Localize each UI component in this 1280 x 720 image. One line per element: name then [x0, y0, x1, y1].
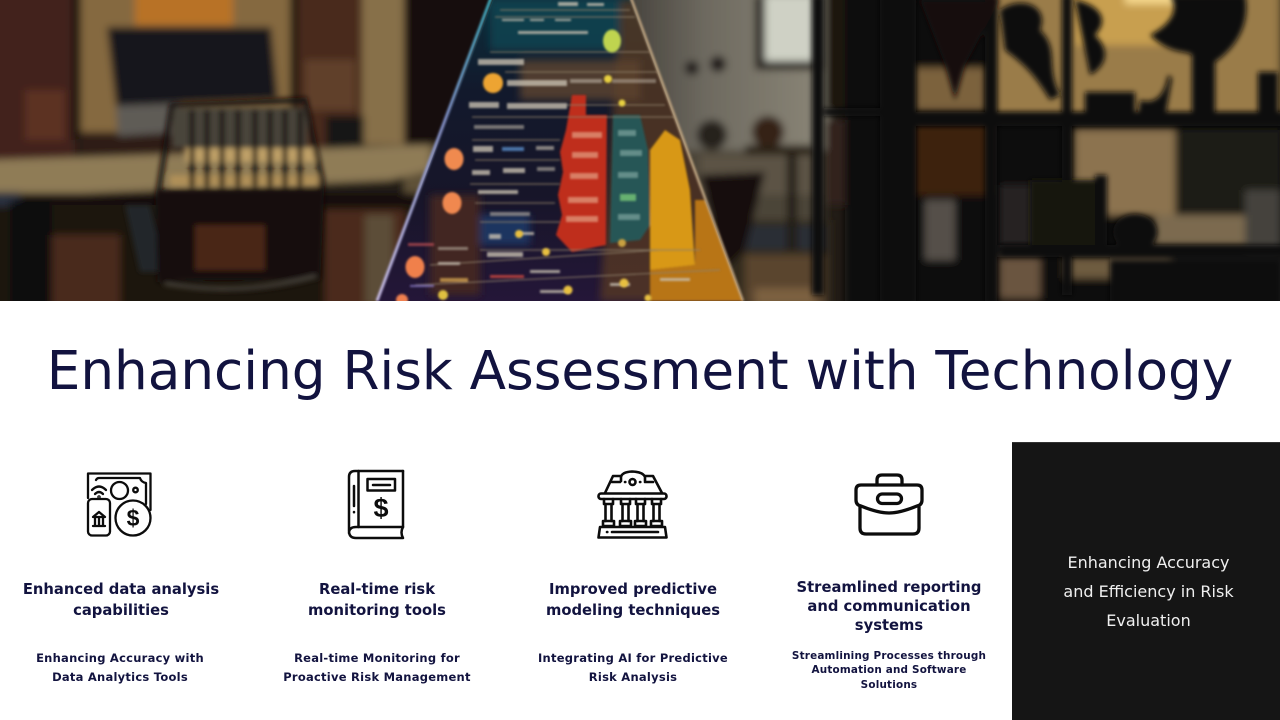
pyramid bullets	[396, 30, 652, 306]
card heading: Enhanced data analysis	[23, 580, 219, 598]
card heading: and communication	[807, 598, 971, 614]
card heading	[546, 580, 720, 618]
title: Enhancing Risk Assessment with Technology	[47, 340, 1233, 402]
card description: Enhancing Accuracy with	[36, 650, 204, 664]
card description: Integrating AI for Predictive	[538, 650, 728, 664]
panel: real-time risk monitoring	[283, 470, 471, 684]
panel: summary sidebar	[1012, 442, 1280, 720]
icon: institution building	[597, 470, 668, 539]
card heading	[308, 580, 446, 618]
card heading: capabilities	[73, 602, 169, 618]
sidebar text: Evaluation	[1106, 611, 1191, 630]
icon: briefcase	[854, 473, 924, 536]
panel: improved predictive modeling	[538, 470, 728, 684]
icon: finance book: $	[373, 493, 389, 523]
card description: Streamlining Processes through	[792, 650, 986, 662]
card heading	[23, 580, 219, 618]
card description: Solutions	[861, 678, 917, 690]
panel: streamlined reporting	[792, 473, 986, 690]
card description	[792, 650, 986, 690]
card description	[283, 650, 471, 684]
card heading: modeling techniques	[546, 602, 720, 618]
card heading	[796, 578, 982, 634]
icon: finance book	[348, 470, 404, 540]
risk pyramid	[377, 0, 750, 306]
card description: Automation and Software	[811, 664, 967, 676]
card description: Data Analytics Tools	[52, 670, 188, 684]
pyramid row marks	[408, 2, 720, 293]
card heading: systems	[855, 616, 923, 634]
icon: money, phone and coin: $	[127, 505, 140, 531]
background right	[625, 0, 1280, 310]
card description: Risk Analysis	[589, 670, 677, 684]
hero photo: blurred office with risk pyramid	[0, 0, 1280, 301]
card heading: Streamlined reporting	[796, 578, 982, 596]
office chair	[125, 100, 322, 289]
card heading: monitoring tools	[308, 602, 446, 618]
card description: Real-time Monitoring for	[294, 650, 460, 664]
pyramid colour columns	[556, 95, 745, 301]
panel: enhanced data analysis	[23, 472, 219, 684]
background left	[0, 0, 1280, 315]
card description: Proactive Risk Management	[283, 670, 471, 684]
icon: money, phone and coin	[86, 472, 152, 537]
card heading: Improved predictive	[549, 580, 717, 598]
pyramid tint	[430, 0, 750, 301]
card description	[538, 650, 728, 684]
pyramid edges	[377, 0, 743, 301]
sidebar text: Enhancing Accuracy	[1067, 553, 1230, 572]
card description	[36, 650, 204, 684]
sidebar text	[1063, 553, 1234, 630]
sidebar text: and Efficiency in Risk	[1063, 582, 1234, 601]
shelving silhouettes	[812, 0, 1280, 310]
card heading: Real-time risk	[319, 580, 435, 598]
